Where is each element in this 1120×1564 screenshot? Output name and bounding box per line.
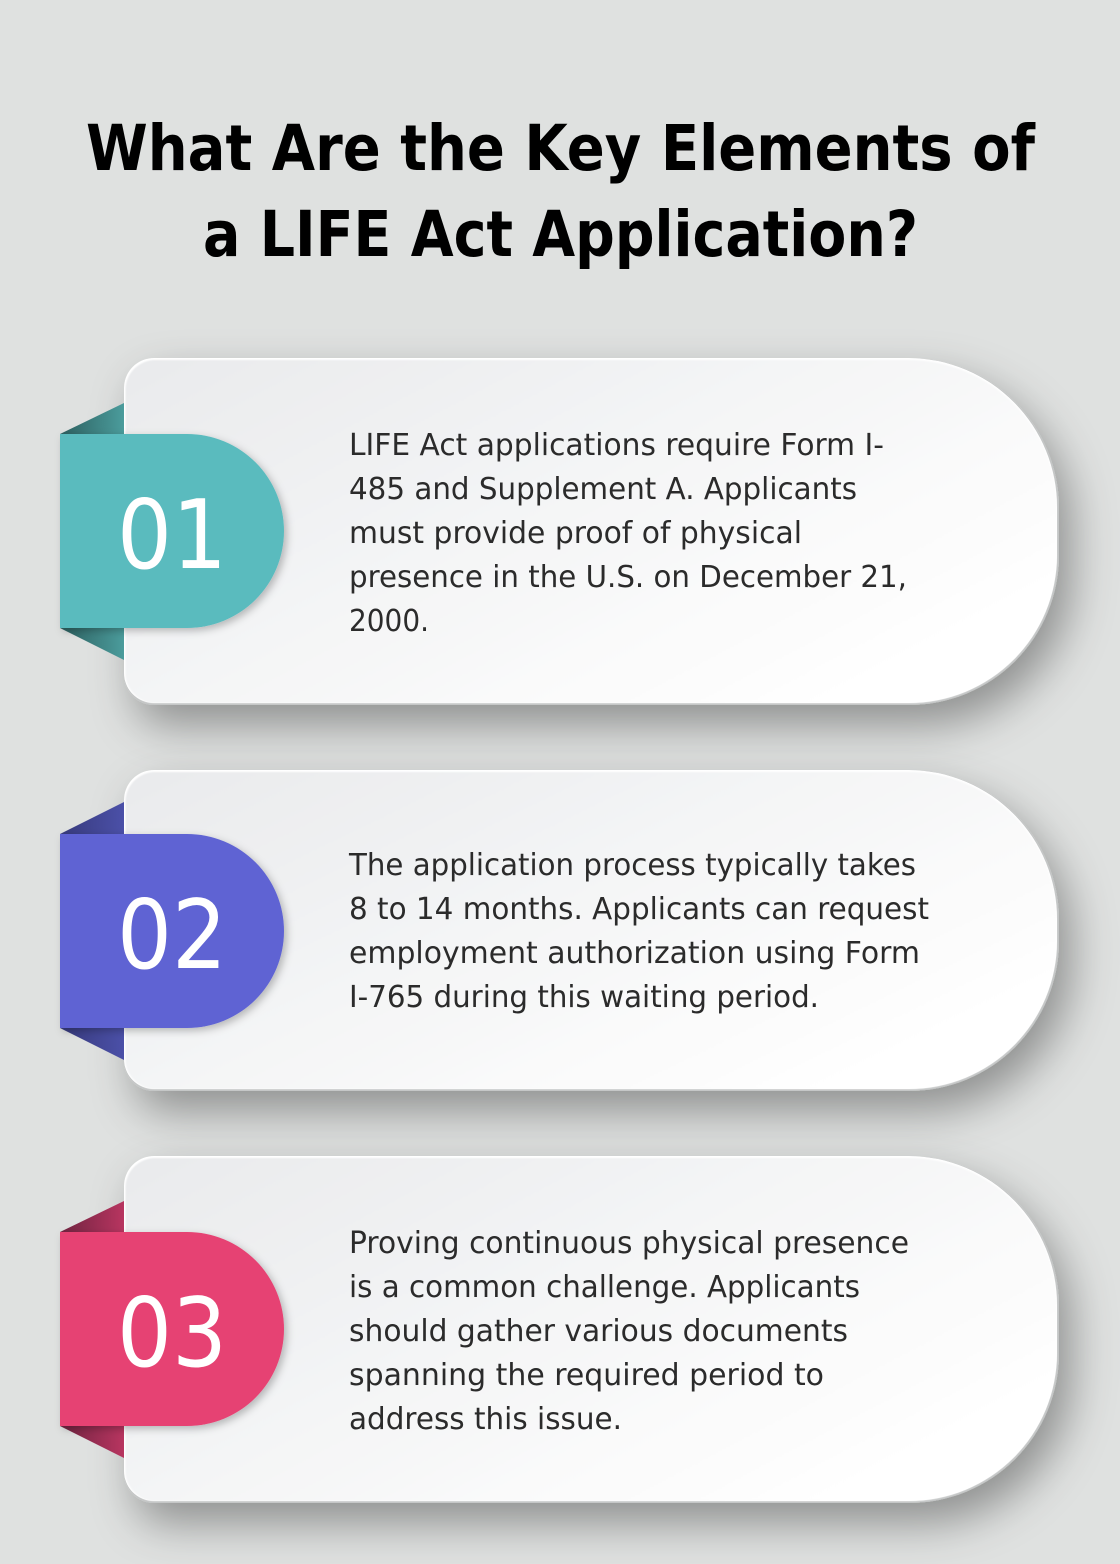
text 03 — [349, 1226, 909, 1437]
fold: bottom blue — [60, 1028, 124, 1060]
card 02 — [124, 770, 1059, 1091]
card 03 — [124, 1156, 1059, 1503]
fold: top teal — [60, 403, 124, 434]
text 01 — [349, 428, 907, 639]
number 02: 02 — [117, 881, 227, 991]
text 02: I-765 during this waiting period. — [349, 980, 819, 1015]
text 02: The application process typically takes — [348, 848, 916, 883]
fold: top blue — [60, 802, 124, 834]
text 01: presence in the U.S. on December 21, — [349, 560, 907, 595]
text 03: spanning the required period to — [349, 1358, 824, 1393]
text 03: address this issue. — [349, 1402, 622, 1437]
text 02 — [348, 848, 929, 1015]
fold: bottom teal — [60, 628, 124, 660]
panel: step 02 — [60, 770, 1059, 1091]
text 03: should gather various documents — [349, 1314, 848, 1349]
text 01: 2000. — [349, 604, 429, 639]
panel: step 03 — [60, 1156, 1059, 1503]
panel: step 01 — [60, 358, 1059, 705]
text 01: 485 and Supplement A. Applicants — [349, 472, 857, 507]
text 01: LIFE Act applications require Form I- — [349, 428, 884, 463]
text 02: employment authorization using Form — [349, 936, 920, 971]
title: a LIFE Act Application? — [203, 198, 918, 271]
fold: top pink — [60, 1201, 124, 1232]
number 03: 03 — [117, 1279, 227, 1389]
badge 01 — [60, 434, 284, 628]
number 01: 01 — [117, 481, 227, 591]
text 02: 8 to 14 months. Applicants can request — [349, 892, 929, 927]
badge 02 — [60, 834, 284, 1028]
card 01 — [124, 358, 1059, 705]
fold: bottom pink — [60, 1426, 124, 1458]
text 03: is a common challenge. Applicants — [349, 1270, 860, 1305]
title — [86, 112, 1036, 271]
badge 03 — [60, 1232, 284, 1426]
text 01: must provide proof of physical — [349, 516, 802, 551]
text 03: Proving continuous physical presence — [349, 1226, 909, 1261]
